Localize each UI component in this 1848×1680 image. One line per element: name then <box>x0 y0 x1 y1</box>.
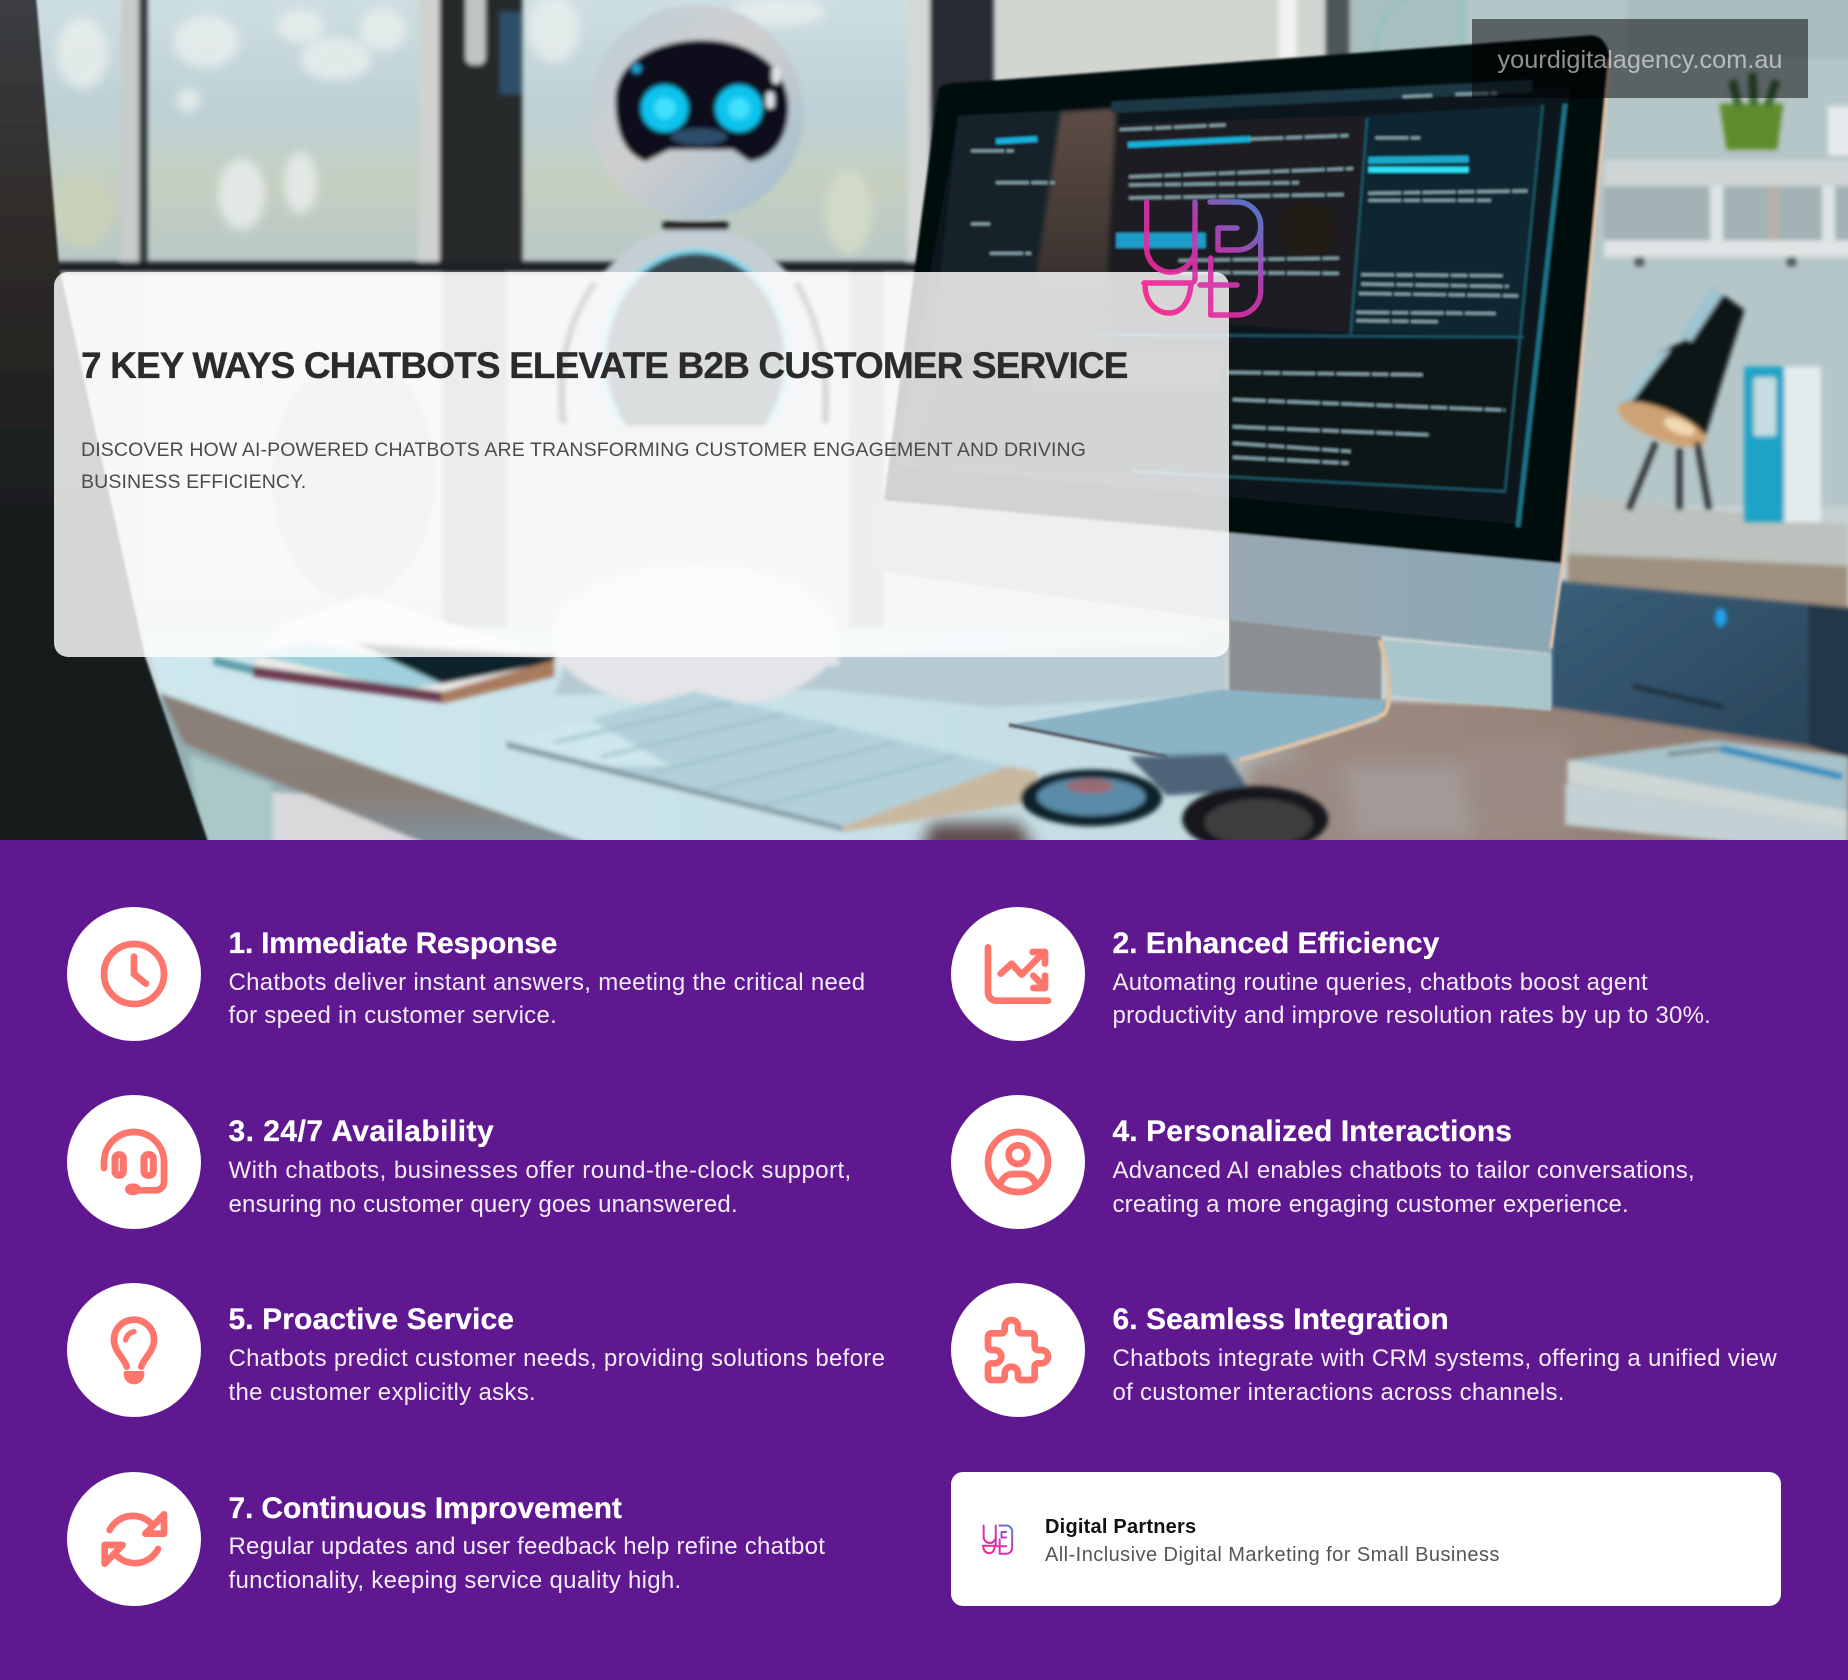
item 3: availability <box>67 1095 852 1229</box>
heading 2: 2. Enhanced Efficiency <box>1112 927 1439 960</box>
heading 6: 6. Seamless Integration <box>1112 1303 1449 1336</box>
item 2: enhanced efficiency <box>951 907 1711 1041</box>
website badge: yourdigitalagency.com.au <box>1498 46 1782 74</box>
text 4: creating a more engaging customer experience. <box>1112 1191 1629 1218</box>
hero photo: robot at desk with monitor <box>0 0 1848 840</box>
panel: purple benefits section <box>0 840 1848 1680</box>
text 1: Chatbots deliver instant answers, meeting the critical need <box>228 968 865 996</box>
text 2: productivity and improve resolution rates by up to 30%. <box>1112 1002 1711 1029</box>
heading 1: 1. Immediate Response <box>228 927 557 960</box>
icon: headset <box>67 1095 201 1229</box>
icon: refresh arrows <box>67 1472 201 1606</box>
text 4 <box>1112 1157 1695 1218</box>
under desk <box>153 693 636 860</box>
text 3: With chatbots, businesses offer round-the-clock support, <box>228 1157 852 1184</box>
text 6 <box>1112 1345 1777 1406</box>
item 4: personalized <box>951 1095 1695 1229</box>
item 6: integration <box>951 1283 1777 1417</box>
text 5: Chatbots predict customer needs, providing solutions before <box>228 1345 885 1372</box>
text 2: Automating routine queries, chatbots boost agent <box>1112 968 1648 996</box>
books right <box>1568 740 1848 813</box>
subtitle: BUSINESS EFFICIENCY. <box>81 471 306 493</box>
item 5: proactive <box>67 1283 885 1417</box>
heading 4: 4. Personalized Interactions <box>1112 1115 1512 1148</box>
text 5: the customer explicitly asks. <box>228 1379 536 1406</box>
heading 7: 7. Continuous Improvement <box>228 1492 622 1524</box>
title: 7 KEY WAYS CHATBOTS ELEVATE B2B CUSTOMER SERVICE <box>81 345 1128 386</box>
desk top <box>141 631 1848 860</box>
text 2 <box>1112 968 1711 1029</box>
brand name: Digital Partners <box>1045 1516 1196 1538</box>
icon: chart <box>951 907 1085 1041</box>
text 1: for speed in customer service. <box>228 1002 557 1029</box>
text 4: Advanced AI enables chatbots to tailor conversations, <box>1112 1157 1695 1184</box>
keyboard <box>507 692 1008 826</box>
back counter and cabinet <box>1568 495 1848 578</box>
lower window <box>59 273 966 627</box>
subtitle <box>81 439 1086 493</box>
text 6: Chatbots integrate with CRM systems, offering a unified view <box>1112 1345 1777 1372</box>
text 7: functionality, keeping service quality high. <box>228 1567 682 1594</box>
text 3: ensuring no customer query goes unanswered. <box>228 1191 738 1218</box>
text 7 <box>228 1533 825 1594</box>
desk objects <box>213 73 1848 854</box>
item 7: continuous improvement <box>67 1472 825 1606</box>
lamp <box>1621 286 1744 436</box>
text 6: of customer interactions across channels. <box>1112 1379 1565 1406</box>
led <box>1715 608 1727 627</box>
text 5 <box>228 1345 885 1406</box>
footer card: Digital Partners <box>951 1472 1781 1606</box>
plant <box>1720 104 1783 150</box>
window background <box>0 0 1848 860</box>
brand tagline: All-Inclusive Digital Marketing for Small Business <box>1045 1544 1500 1566</box>
text 1 <box>228 968 865 1029</box>
binders <box>1744 367 1784 522</box>
monitor <box>878 35 1610 760</box>
heading 3: 3. 24/7 Availability <box>228 1115 494 1148</box>
clouds in panes <box>53 0 872 255</box>
icon: user circle <box>951 1095 1085 1229</box>
shelves <box>1604 160 1848 186</box>
subtitle: DISCOVER HOW AI-POWERED CHATBOTS ARE TRANSFORMING CUSTOMER ENGAGEMENT AND DRIVING <box>81 439 1086 461</box>
glasses <box>1129 754 1249 796</box>
desk reflections <box>919 737 1568 854</box>
notebooks <box>253 595 554 695</box>
curtain <box>0 0 215 860</box>
text 7: Regular updates and user feedback help refine chatbot <box>228 1533 825 1560</box>
robot <box>507 5 849 710</box>
icon: clock <box>67 907 201 1041</box>
screen text <box>971 93 1527 463</box>
heading 5: 5. Proactive Service <box>228 1303 514 1336</box>
panel: hero title card <box>54 272 1229 656</box>
website badge <box>1472 19 1808 98</box>
icon: light bulb <box>67 1283 201 1417</box>
icon: small brand mark <box>982 1524 1014 1555</box>
logo: large brand mark <box>1141 199 1264 318</box>
icon: puzzle piece <box>951 1283 1085 1417</box>
frames and room <box>47 0 1848 860</box>
text 3 <box>228 1157 852 1218</box>
item 1: immediate response <box>67 907 865 1041</box>
